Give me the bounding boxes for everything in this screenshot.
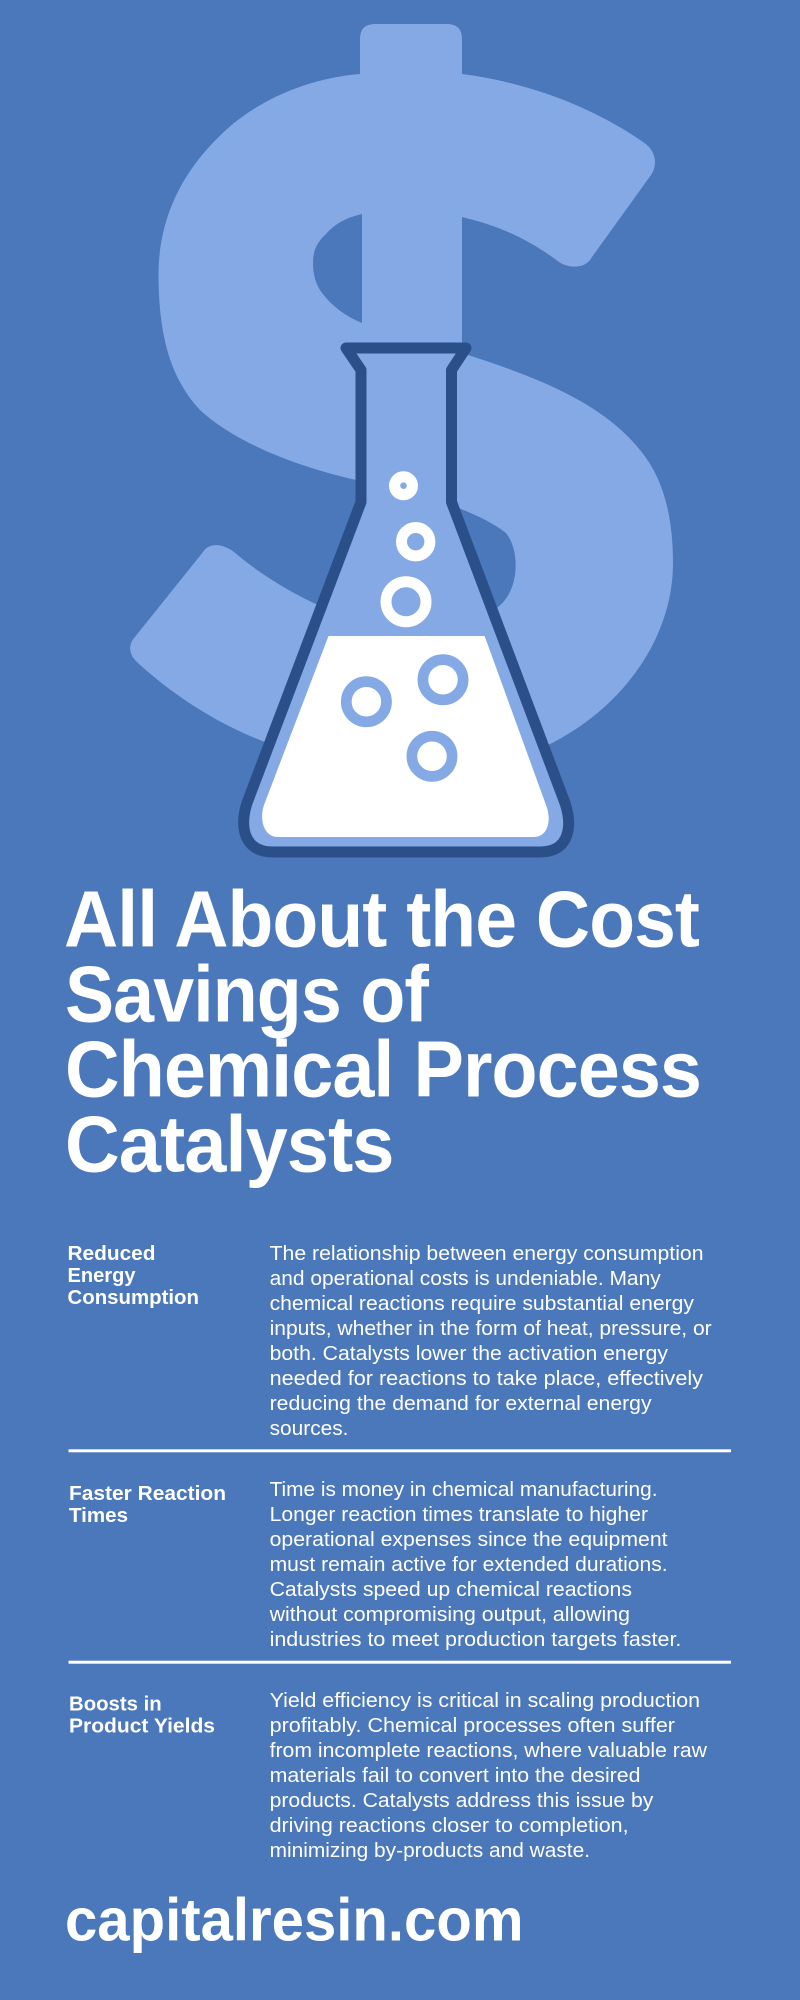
heading: Energy — [68, 1265, 136, 1287]
body text: chemical reactions require substantial energy — [270, 1293, 694, 1315]
body text: needed for reactions to take place, effectively — [270, 1368, 703, 1390]
body text: Catalysts speed up chemical reactions — [270, 1579, 632, 1601]
heading: Times — [69, 1505, 128, 1527]
title: Catalysts — [65, 1100, 394, 1189]
body text: inputs, whether in the form of heat, pressure, or — [270, 1318, 712, 1340]
body text: industries to meet production targets faster. — [270, 1629, 681, 1651]
icon: chemical flask — [244, 348, 569, 852]
flask outline — [244, 348, 569, 852]
title: All About the Cost — [64, 875, 699, 964]
body text: materials fail to convert into the desired — [270, 1765, 640, 1787]
body text: profitably. Chemical processes often suffer — [270, 1715, 675, 1737]
section: reduced energy consumption — [68, 1243, 712, 1440]
heading — [69, 1483, 226, 1527]
heading — [69, 1694, 215, 1738]
body text: products. Catalysts address this issue by — [270, 1790, 653, 1812]
heading: Consumption — [68, 1287, 199, 1309]
body text: both. Catalysts lower the activation energy — [270, 1343, 668, 1365]
body text: minimizing by-products and waste. — [270, 1840, 590, 1862]
body text: Longer reaction times translate to higher — [270, 1504, 648, 1526]
bubbles above liquid — [386, 477, 430, 622]
title: Chemical Process — [65, 1025, 701, 1114]
body text: from incomplete reactions, where valuable raw — [270, 1740, 708, 1762]
heading: Reduced — [68, 1243, 156, 1265]
flask liquid — [262, 636, 549, 837]
body text — [270, 1690, 708, 1862]
heading — [68, 1243, 199, 1309]
body text: without compromising output, allowing — [269, 1604, 630, 1626]
title — [64, 875, 701, 1189]
body text: sources. — [270, 1418, 348, 1440]
website url: capitalresin.com — [65, 1887, 524, 1954]
body text: Yield efficiency is critical in scaling production — [270, 1690, 700, 1712]
icon: dollar sign — [130, 24, 673, 775]
section: boosts in product yields — [69, 1690, 708, 1862]
bubbles in liquid — [346, 660, 463, 776]
body text: Time is money in chemical manufacturing. — [270, 1479, 658, 1501]
body text: The relationship between energy consumption — [270, 1243, 704, 1265]
body text — [270, 1243, 712, 1440]
heading: Boosts in — [69, 1694, 162, 1716]
heading: Product Yields — [69, 1716, 215, 1738]
body text — [269, 1479, 681, 1651]
section: faster reaction times — [69, 1479, 681, 1651]
heading: Faster Reaction — [69, 1483, 226, 1505]
body text: must remain active for extended durations. — [270, 1554, 668, 1576]
body text: driving reactions closer to completion, — [270, 1815, 629, 1837]
body text: and operational costs is undeniable. Many — [270, 1268, 661, 1290]
title: Savings of — [65, 950, 429, 1039]
body text: reducing the demand for external energy — [270, 1393, 652, 1415]
body text: operational expenses since the equipment — [270, 1529, 668, 1551]
